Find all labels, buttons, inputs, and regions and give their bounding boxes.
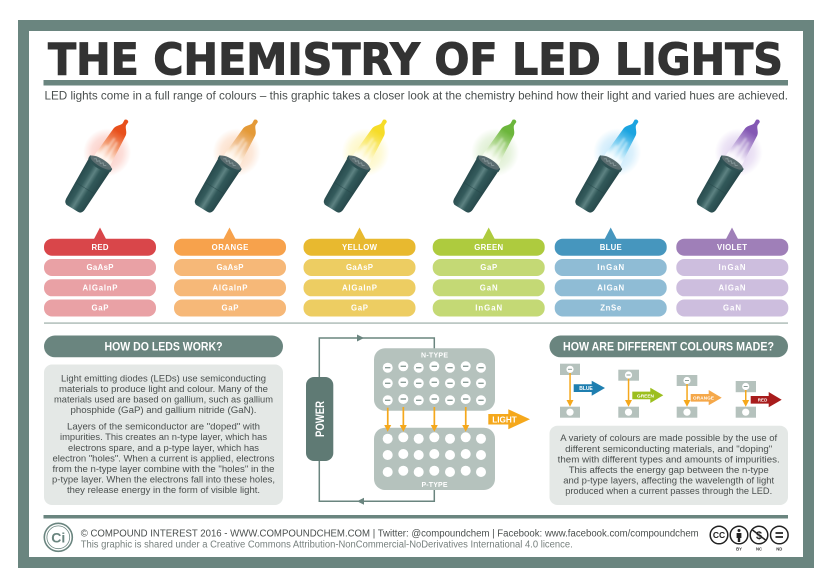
n-type layer (374, 348, 495, 411)
arrow: light (488, 409, 530, 429)
text block: how LEDs work: Layers of the semiconductor are "doped" with (67, 422, 260, 433)
heading: how do LEDs work (44, 336, 283, 357)
icon: blue bulb (562, 107, 658, 221)
bulbs row (52, 107, 779, 221)
panel: red compounds: RED (92, 243, 109, 252)
panel: green compounds: GaP (480, 263, 497, 272)
green gap (618, 370, 663, 418)
blue gap: BLUE (579, 386, 593, 392)
panel: orange compounds: AlGaInP (212, 283, 248, 292)
text block: how LEDs work: from the n-type layer combine with the "holes" in the (52, 464, 274, 475)
text block: how colours are made: different semiconducting materials, and "doping" (565, 444, 772, 455)
power block (306, 377, 333, 461)
green gap: GREEN (637, 393, 655, 399)
icons: creative commons licence: BY (736, 546, 742, 552)
orange gap: ORANGE (693, 396, 714, 401)
panel: yellow compounds: YELLOW (342, 243, 378, 252)
panel: blue compounds: AlGaN (597, 283, 625, 292)
text block: how colours are made: and p-type layers, affecting the wavelength of light (563, 476, 775, 487)
text block: how LEDs work: Light emitting diodes (LEDs) use semiconducting (61, 373, 266, 384)
panel: orange compounds (174, 228, 286, 316)
power block: POWER (315, 400, 327, 437)
logo: compound interest: Ci (51, 529, 65, 545)
panel: green compounds: GREEN (474, 243, 504, 252)
subtitle: LED lights come in a full range of colours – this graphic takes a closer look at the chemistry behind how their light and varied hues are achieved. (44, 90, 788, 102)
footer credits: This graphic is shared under a Creative Commons Attribution-NonCommercial-NoDerivatives International 4.0 licence. (81, 540, 573, 550)
p-type layer: P-TYPE (422, 482, 448, 489)
panel: yellow compounds: GaAsP (346, 263, 373, 272)
red gap: RED (758, 398, 767, 403)
panel: yellow compounds (304, 228, 416, 316)
icon: orange bulb (182, 107, 277, 221)
panel: red compounds (44, 228, 156, 316)
text block: how colours are made: them with different types and amounts of impurities. (558, 454, 780, 465)
blue gap (560, 364, 605, 418)
panel: violet compounds: GaN (723, 304, 741, 313)
diagram: energy gaps (560, 364, 782, 418)
icons: creative commons licence: CC (713, 530, 725, 540)
panel: violet compounds: InGaN (718, 263, 746, 272)
panel: red compounds: AlGaInP (82, 283, 118, 292)
panel: green compounds: GaN (480, 283, 498, 292)
icons: creative commons licence: ND (776, 546, 782, 552)
panel: blue compounds: InGaN (597, 263, 625, 272)
text block: how LEDs work: electrons spare, and a p-type layer, which has (68, 443, 259, 454)
text block: how colours are made: A variety of colours are made possible by the use of (560, 433, 778, 444)
panel: violet compounds: VIOLET (717, 243, 747, 252)
panel: orange compounds: ORANGE (212, 243, 248, 252)
arrow: light: LIGHT (492, 416, 517, 424)
icon: violet bulb (684, 107, 779, 221)
heading: how are different colours made (550, 336, 788, 357)
panel: yellow compounds: AlGaInP (342, 283, 377, 292)
heading: how are different colours made: HOW ARE DIFFERENT COLOURS MADE? (563, 340, 774, 354)
panel: blue compounds: ZnSe (600, 304, 622, 313)
p-type layer (374, 428, 495, 490)
panel: green compounds: InGaN (475, 304, 503, 313)
diagram: LED circuit (306, 334, 530, 505)
heading: how do LEDs work: HOW DO LEDS WORK? (104, 340, 222, 354)
electron arrows (384, 407, 469, 432)
panel: blue compounds (555, 228, 667, 316)
panel: violet compounds (676, 228, 788, 316)
icon: red bulb (52, 107, 148, 221)
text block: how LEDs work: p-type layer. When the electrons fall into these holes, (52, 475, 275, 486)
panel: red compounds: GaAsP (86, 263, 114, 272)
text block: how LEDs work: impurities. This creates an n-type layer, which has (60, 432, 267, 443)
text block: how colours are made: produced when a current passes through the LED. (565, 486, 772, 497)
text block: how LEDs work: materials to produce light and colour. Many of the (59, 384, 268, 395)
red gap (736, 381, 782, 418)
text block: how LEDs work: electron "holes". When a current is applied, electrons (52, 453, 275, 464)
text block: how LEDs work: materials used are based on gallium, such as gallium (54, 394, 273, 405)
panel: violet compounds: AlGaN (718, 283, 746, 292)
icon: green bulb (440, 107, 536, 221)
text block: how LEDs work: they release energy in the form of visible light. (67, 485, 260, 496)
text block: how colours are made (550, 426, 788, 505)
panel: blue compounds: BLUE (600, 243, 622, 252)
icons: creative commons licence: NC (756, 546, 762, 552)
orange gap (677, 375, 722, 418)
text block: how colours are made: This affects the energy gap between the n-type (569, 465, 769, 476)
logo: compound interest (44, 523, 72, 551)
text block: how LEDs work: phosphide (GaP) and gallium nitride (GaN). (70, 405, 256, 416)
title: THE CHEMISTRY OF LED LIGHTS (48, 34, 783, 86)
circuit wires (319, 334, 434, 505)
footer credits: © COMPOUND INTEREST 2016 - WWW.COMPOUNDCHEM.COM | Twitter: @compoundchem | Facebook: www.facebook.com/compoundchem (81, 528, 699, 539)
icons: creative commons licence: $ (756, 530, 762, 542)
icon: yellow bulb (311, 107, 406, 221)
title underline (44, 80, 788, 86)
panel: orange compounds: GaP (222, 304, 238, 313)
text block: how LEDs work (44, 364, 283, 505)
panel: orange compounds: GaAsP (216, 263, 244, 272)
panel: green compounds (433, 228, 545, 316)
panel: red compounds: GaP (92, 304, 108, 313)
icons: creative commons licence (710, 526, 788, 552)
panel: yellow compounds: GaP (351, 304, 368, 313)
footer credits (81, 528, 699, 550)
n-type layer: N-TYPE (421, 352, 448, 360)
